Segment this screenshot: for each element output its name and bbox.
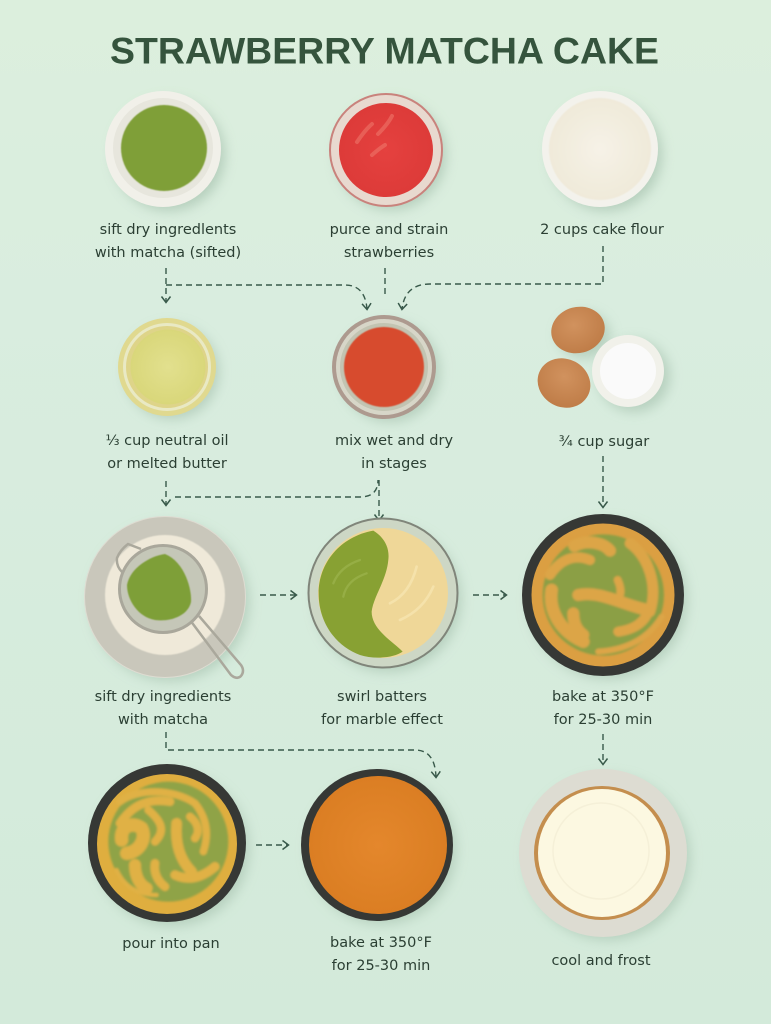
icon: mixed wet and dry bowl xyxy=(332,315,440,422)
arrows: row 2 to row 3 xyxy=(166,456,603,595)
label: 2 cups cake flour: 2 cups cake flour xyxy=(540,222,664,238)
label: sugar: ¾ cup sugar xyxy=(559,434,649,450)
label: sift dry ingredients with matcha: sift dry ingredients xyxy=(95,689,231,705)
label: sift dry ingredients with matcha: with matcha xyxy=(118,712,208,728)
label: neutral oil: ⅓ cup neutral oil xyxy=(105,433,229,449)
label: puree and strain strawberries: purce and strain xyxy=(330,222,448,238)
label: cool and frost: cool and frost xyxy=(551,953,651,969)
label: sift dry ingredients with matcha (sifted): sift dry ingredlents xyxy=(100,222,236,238)
icon: oil glass bowl xyxy=(118,318,219,419)
arrows: row 1 to row 2 xyxy=(166,246,603,309)
icon: frosted cake on plate xyxy=(519,769,690,940)
icon: cake flour bowl xyxy=(542,91,662,211)
label: puree and strain strawberries: strawberries xyxy=(344,245,434,261)
label: mix wet and dry: in stages xyxy=(361,456,427,472)
icon: sieve over flour plate xyxy=(84,516,249,681)
label: swirl batters: for marble effect xyxy=(321,712,443,728)
label: mix wet and dry: mix wet and dry xyxy=(335,433,453,449)
label: neutral oil: or melted butter xyxy=(107,456,227,472)
label: bake orange cake: bake at 350°F xyxy=(330,935,432,951)
icon: swirl batter bowl xyxy=(308,518,461,672)
label: swirl batters: swirl batters xyxy=(337,689,427,705)
label: bake marble: bake at 350°F xyxy=(552,689,654,705)
icon: strawberry puree bowl xyxy=(330,94,446,210)
arrows: row 3 to row 4 xyxy=(166,732,603,845)
icon: marbled cake in pan xyxy=(522,514,687,679)
icon: batter in pan xyxy=(88,764,249,926)
icon: matcha powder bowl xyxy=(105,91,225,211)
icon: baked orange cake in pan xyxy=(301,769,456,924)
icon: eggs and sugar xyxy=(529,301,670,417)
label: bake marble: for 25-30 min xyxy=(554,712,652,728)
label: pour into pan: pour into pan xyxy=(122,936,220,952)
label: sift dry ingredients with matcha (sifted): with matcha (sifted) xyxy=(95,245,241,261)
label: bake orange cake: for 25-30 min xyxy=(332,958,430,974)
title: STRAWBERRY MATCHA CAKE xyxy=(110,30,659,72)
